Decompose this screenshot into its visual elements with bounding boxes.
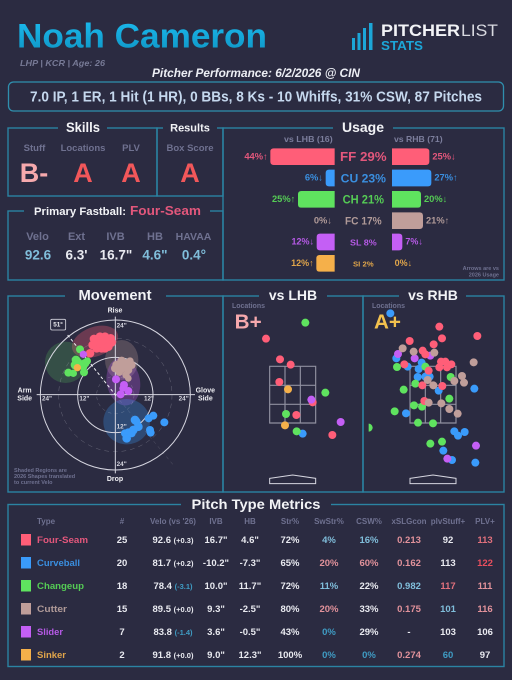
usage note: Arrows are vs: [463, 266, 499, 272]
row: Changeup: 18: [117, 581, 127, 592]
usage bars: FC 17%: [345, 216, 382, 228]
row: Curveball: Curveball: [37, 558, 80, 569]
row: Curveball: 20%: [319, 558, 339, 569]
row: Curveball: -10.2": [203, 558, 229, 569]
table header: #: [120, 517, 125, 526]
heading: skills: Skills: [66, 120, 100, 135]
row: Changeup: [21, 580, 493, 592]
row: Four-Seam: 72%: [280, 535, 300, 546]
usage bars: 6%↓: [305, 173, 323, 183]
logo: Pitcher List Stats: LIST: [461, 21, 498, 40]
panel: primary fastball: IVB: [106, 231, 125, 243]
row: Curveball: 0.162: [397, 558, 421, 569]
panel: primary fastball: HB: [147, 231, 163, 243]
movement note: [14, 468, 75, 486]
panel: skills: [8, 120, 157, 196]
panel: primary fastball: [8, 204, 223, 280]
row: Sinker: 12.3": [238, 650, 262, 661]
row: Curveball: -7.3": [240, 558, 260, 569]
panel: skills: A: [73, 158, 93, 188]
usage bars: 20%↓: [424, 194, 447, 204]
game subtitle: Pitcher Performance: 6/2/2026 @ CIN: [152, 68, 361, 80]
row: Slider: 43%: [280, 627, 300, 638]
usage bars: FF 29%: [340, 150, 387, 164]
location chart RHB: [369, 303, 481, 484]
row: Changeup: Changeup: [37, 581, 84, 592]
panel: skills: Stuff: [24, 143, 46, 154]
movement polar chart: Arm: [18, 388, 32, 395]
usage bars: 7%↓: [405, 237, 423, 247]
row: Cutter: 0.175: [397, 604, 422, 615]
row: Cutter: 80%: [280, 604, 300, 615]
summary box: [8, 82, 504, 111]
location chart LHB: [232, 303, 345, 484]
row: Sinker: 97: [480, 650, 490, 661]
row: Cutter: 89.5 (+0.0): [153, 604, 194, 615]
row: Slider: -: [407, 627, 411, 638]
row: Curveball: [21, 557, 493, 569]
player info: LHP | KCR | Age: 26: [20, 58, 105, 68]
row: Four-Seam: 16%: [359, 535, 379, 546]
usage bars: 12%↑: [291, 258, 314, 268]
panel: primary fastball: 4.6": [142, 248, 168, 262]
panel: primary fastball: HAVAA: [176, 231, 212, 243]
location chart LHB: B+: [235, 310, 262, 333]
row: Slider: 106: [477, 627, 493, 638]
logo: Pitcher List Stats: PITCHER: [381, 21, 460, 40]
row: Four-Seam: 113: [477, 535, 493, 546]
table header: Type: [37, 517, 56, 526]
row: Curveball: 20: [117, 558, 127, 569]
row: Cutter: 20%: [319, 604, 339, 615]
usage bars: vs LHB (16): [284, 134, 333, 144]
panel: vs LHB: [223, 287, 363, 492]
panel: results: Box Score: [166, 143, 214, 154]
panel: results: [157, 122, 223, 196]
row: Four-Seam: 92.6 (+0.3): [153, 535, 194, 546]
usage bars: 0%↓: [395, 258, 412, 268]
row: Slider: 29%: [359, 627, 379, 638]
row: Slider: 103: [440, 627, 456, 638]
panel: pitch type metrics: [8, 496, 504, 666]
table header: [37, 517, 495, 526]
row: Cutter: [21, 603, 493, 615]
row: Changeup: 117: [440, 581, 456, 592]
row: Slider: -0.5": [240, 627, 260, 638]
movement polar chart: 24": [42, 396, 52, 403]
row: Cutter: 33%: [359, 604, 379, 615]
movement polar chart: Drop: [107, 476, 123, 483]
usage bars: SL 8%: [350, 237, 377, 247]
table header: HB: [244, 517, 256, 526]
panel: vs RHB: [363, 287, 504, 492]
row: Changeup: 0.982: [397, 581, 421, 592]
logo: Pitcher List Stats: [352, 21, 498, 53]
location chart LHB: Locations: [232, 303, 265, 310]
movement polar chart: Rise: [108, 308, 122, 315]
heading: movement: Movement: [78, 288, 152, 304]
row: Cutter: Cutter: [37, 604, 67, 615]
row: Changeup: 78.4 (-3.1): [153, 581, 193, 592]
row: Slider: 83.8 (-1.4): [153, 627, 193, 638]
row: Curveball: 65%: [280, 558, 300, 569]
movement polar chart: Glove: [196, 388, 215, 395]
table header: IVB: [209, 517, 223, 526]
table header: PLV+: [475, 517, 495, 526]
row: Cutter: 116: [477, 604, 493, 615]
heading: vs RHB: vs RHB: [408, 287, 458, 303]
movement note: Shaded Regions are: [14, 468, 67, 474]
panel: skills: PLV: [122, 143, 141, 154]
heading: results: Results: [170, 122, 210, 134]
row: Changeup: 72%: [280, 581, 300, 592]
usage bars: 25%↑: [272, 194, 295, 204]
usage bars: 21%↑: [426, 215, 449, 225]
usage bars: 44%↑: [244, 151, 268, 161]
movement polar chart: 24": [179, 396, 189, 403]
row: Sinker: 60: [443, 650, 453, 661]
row: Sinker: 0%: [362, 650, 376, 661]
movement polar chart: Side: [198, 396, 213, 403]
table header: Str%: [281, 517, 299, 526]
usage bars: CH 21%: [343, 194, 385, 207]
panel: usage: [223, 119, 504, 280]
row: Curveball: 122: [477, 558, 493, 569]
panel: primary fastball: 0.4°: [182, 248, 206, 262]
movement polar chart: 12": [79, 396, 89, 403]
row: Four-Seam: 92: [443, 535, 453, 546]
row: Curveball: 113: [440, 558, 456, 569]
usage bars: SI 2%: [353, 259, 374, 268]
row: Slider: 7: [119, 627, 125, 638]
movement polar chart: [17, 308, 215, 483]
row: Four-Seam: 0.213: [397, 535, 421, 546]
row: Four-Seam: 16.7": [204, 535, 228, 546]
row: Changeup: 10.0": [204, 581, 228, 592]
panel: primary fastball: 6.3': [66, 248, 87, 262]
title: Noah Cameron: [17, 18, 267, 56]
usage bars: 12%↓: [292, 237, 314, 247]
heading: usage: Usage: [342, 119, 384, 135]
row: Four-Seam: 4%: [322, 535, 336, 546]
row: Sinker: 0%: [322, 650, 336, 661]
row: Four-Seam: [21, 534, 493, 546]
movement note: to current Velo: [14, 480, 53, 486]
movement polar chart: 12": [117, 423, 127, 430]
table header: CSW%: [356, 517, 382, 526]
panel: primary fastball: Velo: [26, 231, 49, 243]
row: Changeup: 111: [478, 581, 493, 592]
row: Sinker: 9.0": [207, 650, 225, 661]
usage note: 2026 Usage: [469, 272, 499, 278]
panel: primary fastball: Ext: [68, 231, 85, 243]
usage bars: [244, 134, 458, 272]
row: Curveball: 81.7 (+0.2): [153, 558, 194, 569]
row: Slider: 3.6": [207, 627, 225, 638]
row: Cutter: -2.5": [240, 604, 260, 615]
panel: skills: B-: [20, 158, 48, 188]
usage bars: 0%↓: [314, 215, 332, 225]
heading: primary fastball: Primary Fastball:: [34, 206, 126, 218]
usage bars: 25%↓: [432, 151, 456, 161]
row: Changeup: 11%: [320, 581, 339, 592]
movement polar chart: 51°: [53, 321, 63, 329]
row: Changeup: 11.7": [239, 581, 261, 592]
row: Changeup: 22%: [359, 581, 379, 592]
panel: movement: [8, 288, 223, 492]
table header: xSLGcon: [391, 517, 427, 526]
row: Cutter: 15: [117, 604, 128, 615]
heading: pitch type metrics: Pitch Type Metrics: [192, 496, 321, 512]
panel: primary fastball: Four-Seam: [130, 204, 201, 218]
row: Curveball: 60%: [359, 558, 379, 569]
usage bars: CU 23%: [341, 171, 386, 185]
logo: Pitcher List Stats: STATS: [381, 39, 423, 53]
table header: Velo (vs '26): [150, 517, 196, 526]
row: Sinker: Sinker: [37, 650, 66, 661]
row: Sinker: 91.8 (+0.0): [153, 650, 194, 661]
row: Cutter: 9.3": [207, 604, 225, 615]
movement polar chart: 12": [144, 396, 154, 403]
panel: primary fastball: 16.7": [100, 248, 132, 262]
table header: plvStuff+: [431, 517, 466, 526]
heading: vs LHB: vs LHB: [269, 287, 317, 303]
row: Four-Seam: 25: [117, 535, 128, 546]
row: Sinker: [21, 649, 490, 661]
usage bars: vs RHB (71): [394, 134, 443, 144]
location chart RHB: Locations: [372, 303, 405, 310]
summary box: 7.0 IP, 1 ER, 1 Hit (1 HR), 0 BBs, 8 Ks - 10 Whiffs, 31% CSW, 87 Pitches: [30, 90, 482, 106]
panel: skills: A: [121, 158, 141, 188]
movement polar chart: Side: [17, 396, 32, 403]
row: Slider: 0%: [322, 627, 336, 638]
panel: results: A: [180, 158, 200, 188]
row: Slider: [21, 626, 493, 638]
row: Four-Seam: Four-Seam: [37, 535, 88, 546]
table header: SwStr%: [314, 517, 344, 526]
row: Sinker: 0.274: [397, 650, 422, 661]
movement note: 2026 Shapes translated: [14, 474, 75, 480]
row: Sinker: 2: [119, 650, 125, 661]
row: Slider: Slider: [37, 627, 63, 638]
panel: primary fastball: 92.6: [25, 248, 52, 262]
location chart RHB: A+: [374, 310, 401, 333]
usage bars: 27%↑: [434, 173, 458, 183]
movement polar chart: 24": [117, 322, 127, 329]
row: Cutter: 101: [440, 604, 457, 615]
row: Four-Seam: 4.6": [241, 535, 259, 546]
movement polar chart: 24": [117, 461, 127, 468]
row: Sinker: 100%: [278, 650, 303, 661]
usage note: [463, 266, 499, 278]
panel: skills: Locations: [61, 143, 105, 154]
